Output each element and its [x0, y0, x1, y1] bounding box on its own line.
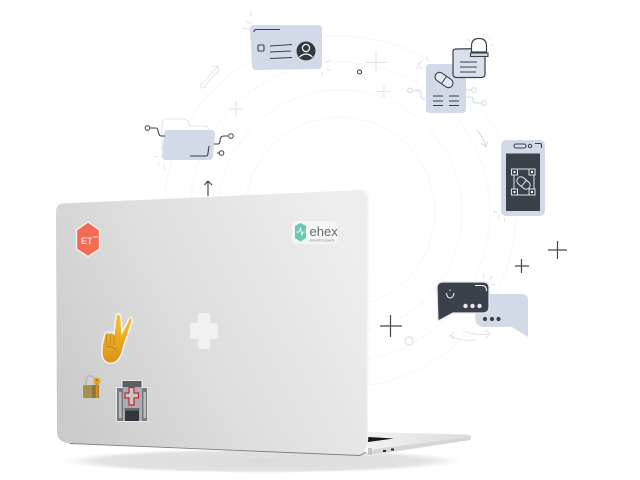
icon: smartphone with scan code — [493, 140, 545, 222]
icon: plus small upper centre — [377, 85, 391, 98]
icon: ID card — [243, 10, 331, 77]
icon: folder with circuit connectors — [145, 119, 233, 170]
icon: double arrow top left — [201, 66, 219, 88]
arrow: up from laptop — [204, 181, 212, 196]
sticker: white medical cross — [190, 313, 218, 349]
icon: plus dark far right — [548, 241, 567, 259]
icon: small ring dot — [358, 70, 362, 74]
laptop — [56, 190, 471, 456]
laptop shadow — [62, 449, 462, 473]
sticker: victory hand emoji — [102, 314, 132, 363]
icon: plus dark lower centre — [380, 315, 402, 337]
icon: plus dark right — [515, 259, 529, 273]
sticker: ehex logo: eHealth Experts — [310, 238, 335, 242]
icon: plus large upper centre — [365, 52, 387, 73]
icon: prescription document with pill — [408, 56, 486, 113]
icon: plus top left — [229, 101, 243, 117]
sticker: ET hexagon logo — [76, 222, 100, 256]
sticker: ehex logo — [292, 221, 338, 244]
arrow: curved down to phone — [477, 130, 488, 147]
sticker: hospital building emoji — [116, 380, 148, 422]
icon: chat bubbles — [437, 274, 528, 337]
concentric orbit rings — [164, 36, 516, 388]
sticker: ET hexagon logo: ET — [81, 236, 93, 246]
icon: double arrow under chat — [450, 330, 490, 340]
icon: alert note with siren — [453, 31, 493, 78]
icon: small ring lower centre — [405, 337, 413, 345]
sticker: ehex logo: ehex — [310, 224, 338, 239]
sticker: lock with key emoji — [83, 376, 100, 398]
